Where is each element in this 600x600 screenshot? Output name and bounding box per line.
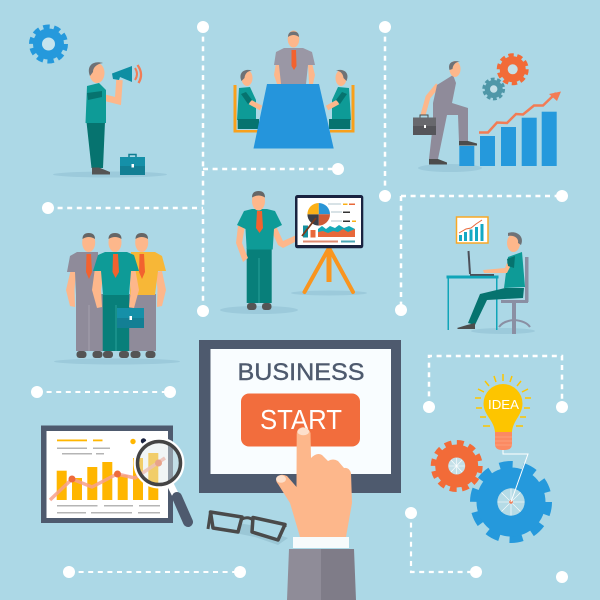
- icon: orange gear: [434, 443, 480, 489]
- panel: man with megaphone: [53, 62, 167, 177]
- icon: light bulb: IDEA: [488, 397, 519, 412]
- icon: briefcase: [117, 308, 144, 328]
- panel: tablet: [199, 340, 401, 493]
- chair: [499, 257, 530, 334]
- icon: blue gear: [474, 465, 548, 539]
- man left grey: [66, 233, 103, 358]
- growth arrow: [479, 92, 561, 132]
- rays: [475, 374, 531, 426]
- icon: magnifying glass: [135, 439, 188, 522]
- icon: briefcase: [413, 115, 436, 135]
- seated man: [457, 232, 525, 329]
- board chart: [295, 195, 363, 248]
- laptop: [468, 251, 494, 276]
- icon: eyeglasses: [208, 512, 288, 545]
- icon: teal gear: [484, 79, 504, 99]
- desk: [446, 276, 498, 330]
- panel: analytics report with magnifier: [41, 426, 188, 523]
- icon: light bulb: [475, 374, 531, 450]
- heading: BUSINESS: [238, 359, 364, 386]
- sleeve: [287, 549, 356, 600]
- small chart poster: [456, 217, 488, 243]
- cuff: [293, 537, 349, 548]
- icon: megaphone: [112, 65, 141, 83]
- icon: orange gear: [499, 55, 527, 83]
- easel: [304, 248, 353, 292]
- table: [254, 84, 334, 148]
- presenter: [236, 191, 303, 310]
- wire: [503, 450, 528, 502]
- icon: hand pressing: [276, 427, 356, 600]
- bar chart: [459, 112, 557, 166]
- bar chart: [57, 453, 158, 500]
- seated man left: [234, 70, 261, 132]
- panel: climbing growth chart: [413, 55, 561, 172]
- area chart: [318, 225, 355, 237]
- start button: [241, 394, 360, 446]
- panel: idea and gears: [434, 374, 548, 539]
- seated man right: [327, 70, 354, 132]
- line chart: [50, 458, 165, 500]
- panel: meeting at table: [234, 30, 354, 148]
- panel: man at laptop: [446, 217, 535, 334]
- standing man: [274, 30, 315, 84]
- climbing man: [413, 61, 477, 164]
- man centre teal: [92, 233, 144, 358]
- panel: team of three: [54, 233, 180, 364]
- icon: blue gear top left: [32, 27, 66, 61]
- panel: presenter with board: [220, 191, 367, 314]
- pie chart: [307, 203, 330, 226]
- icon: briefcase: [120, 154, 145, 175]
- start button: START: [260, 404, 342, 435]
- man right yellow: [129, 233, 166, 358]
